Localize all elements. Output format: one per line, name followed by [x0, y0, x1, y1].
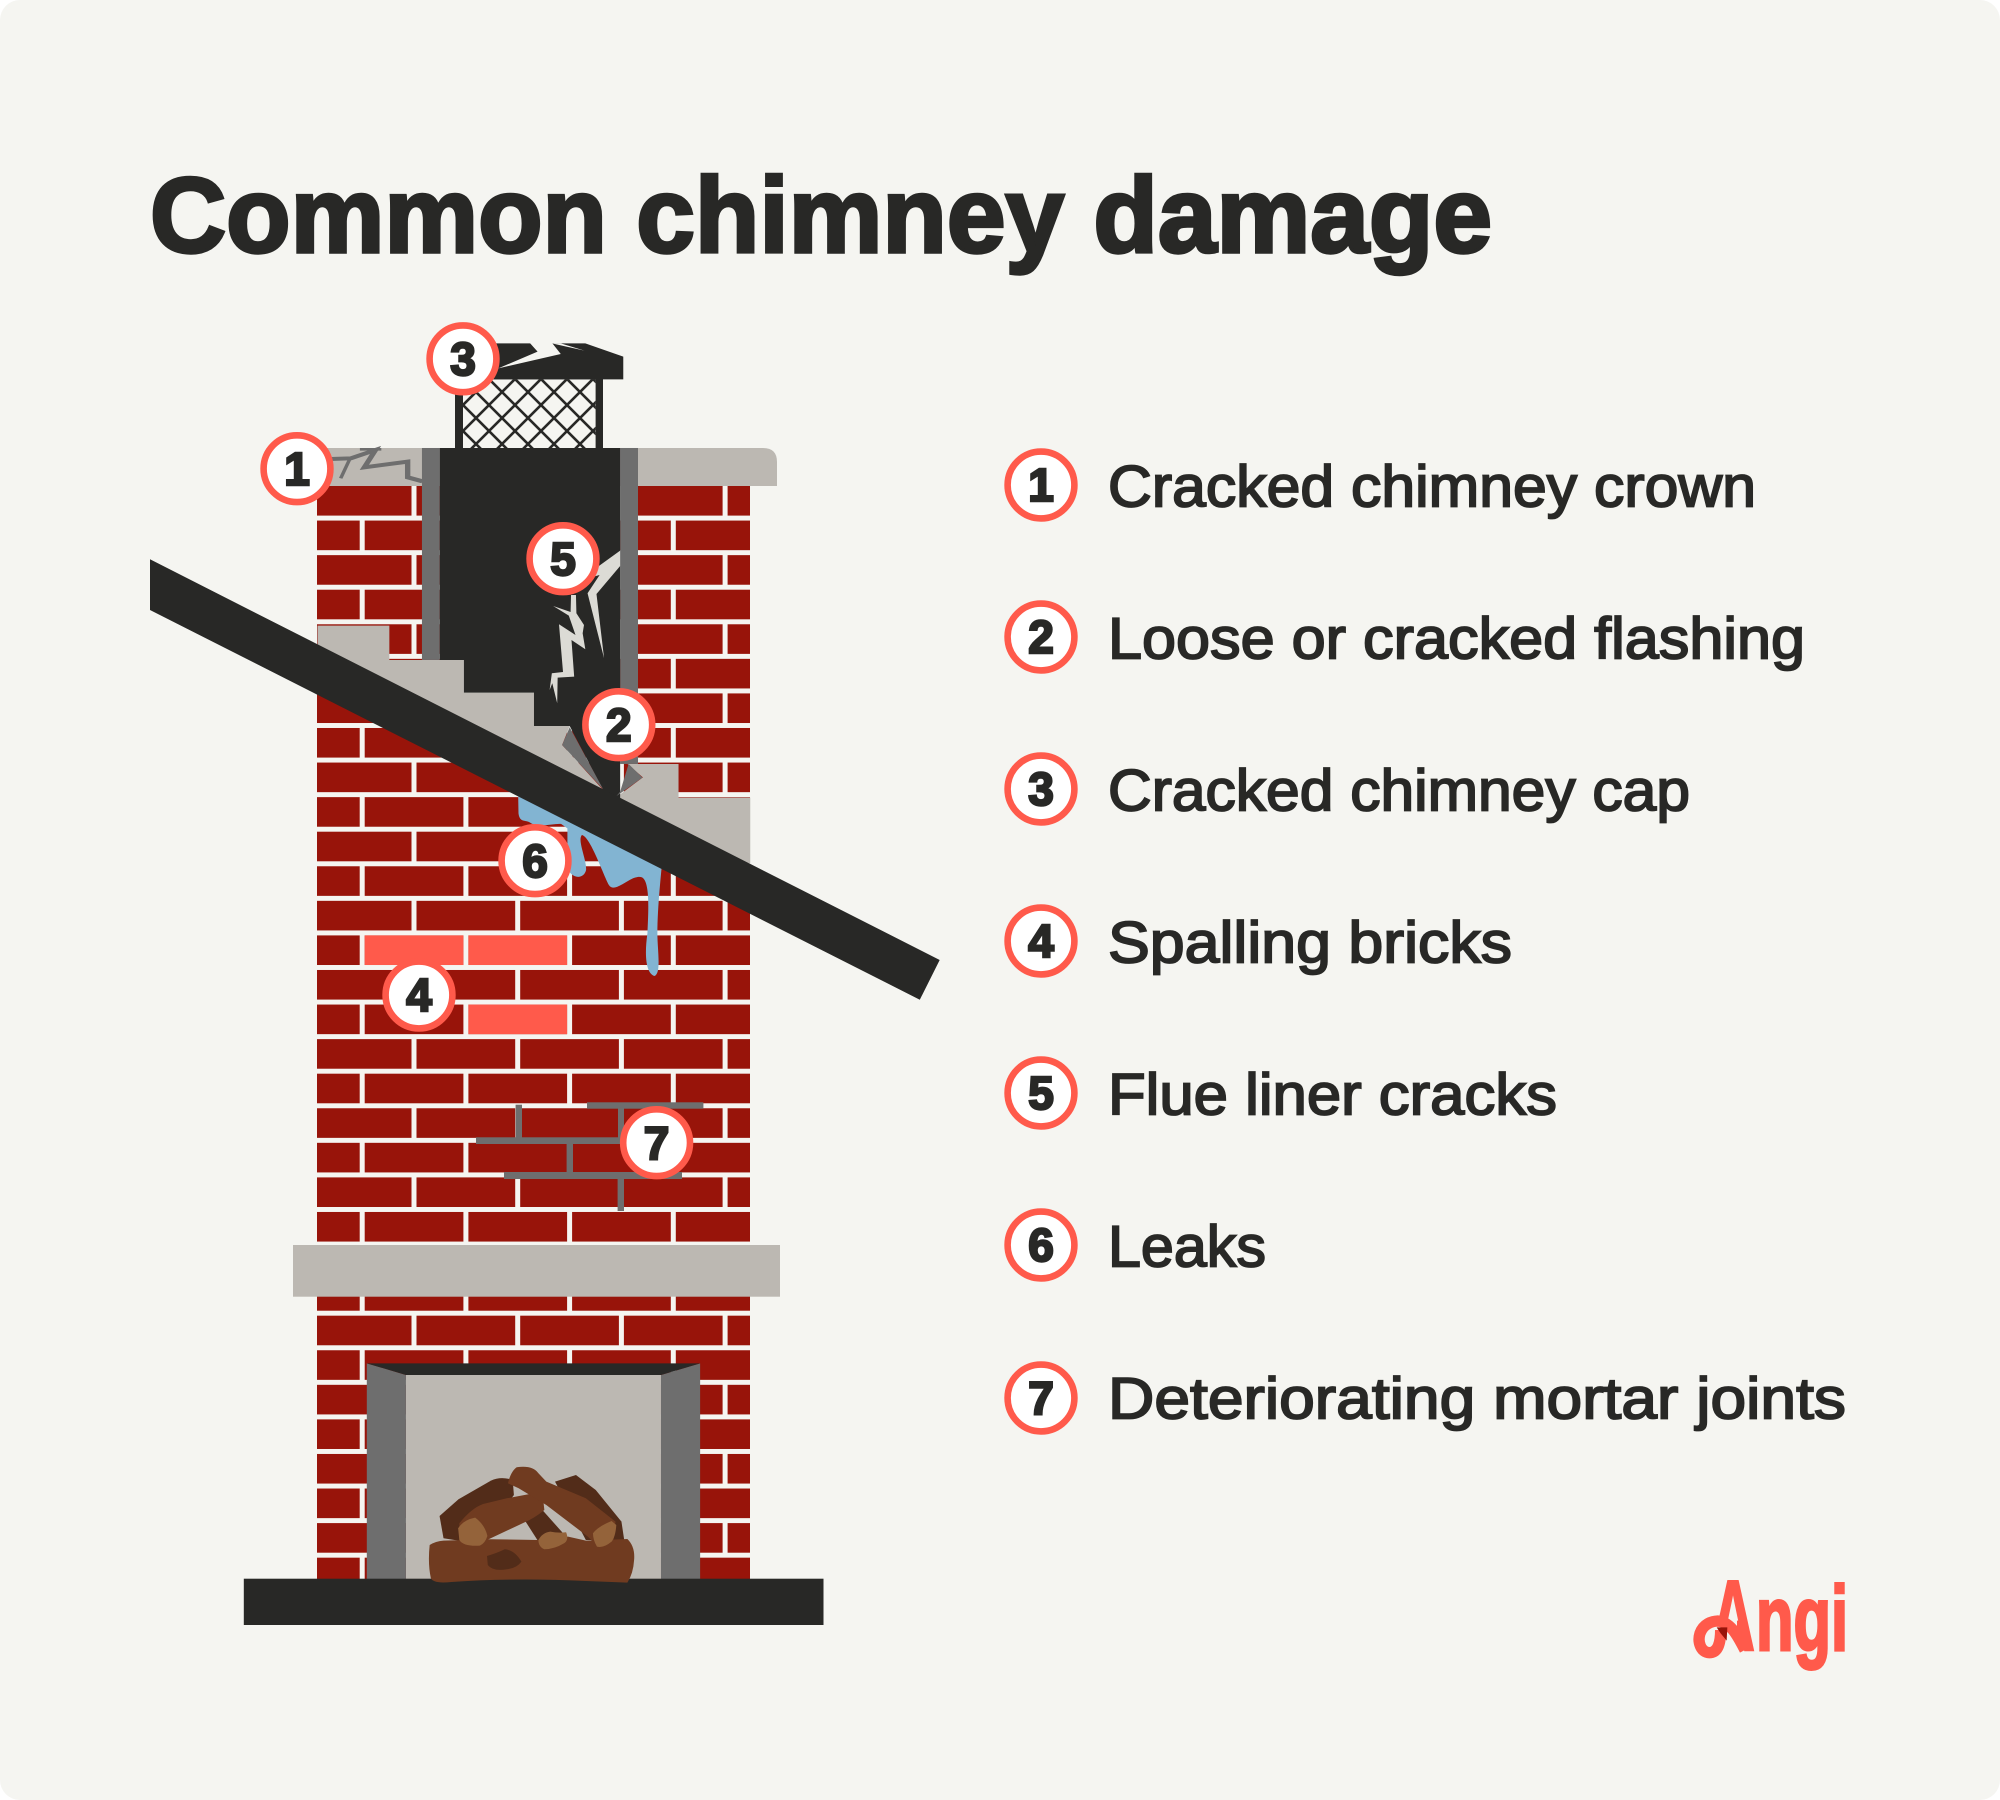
marker 5: 5 — [550, 533, 576, 585]
mantel shelf — [293, 1245, 780, 1297]
legend item 2: Loose or cracked flashing — [1108, 606, 1805, 672]
marker 2: 2 — [606, 699, 632, 751]
marker 3 — [430, 325, 496, 392]
title: Common chimney damage — [150, 155, 1492, 275]
marker 4: 4 — [406, 969, 432, 1021]
legend item 4: Spalling bricks — [1108, 910, 1512, 976]
legend item 3: Cracked chimney cap — [1108, 758, 1690, 824]
logo: Angi: ngi — [1756, 1568, 1848, 1670]
legend item 4: 4 — [1028, 915, 1054, 967]
brick wall — [317, 486, 750, 1587]
chimney cap frame and mesh — [455, 375, 603, 448]
spalling bricks — [365, 935, 567, 1034]
deteriorating mortar joints — [476, 1102, 703, 1211]
right flashing — [617, 764, 750, 863]
marker 7: 7 — [644, 1117, 669, 1169]
logs — [429, 1467, 634, 1583]
legend item 1: Cracked chimney crown — [1108, 454, 1756, 520]
marker 3: 3 — [450, 333, 476, 385]
legend list — [1008, 452, 1846, 1432]
flue liner — [422, 448, 638, 800]
flashing flaps — [562, 727, 642, 796]
marker 1 — [264, 435, 330, 502]
hearth — [244, 1579, 824, 1625]
legend item 2: 2 — [1028, 611, 1054, 663]
firebox — [367, 1363, 700, 1579]
legend item 6: Leaks — [1108, 1214, 1266, 1280]
marker 4 — [386, 962, 452, 1028]
chimney crown — [310, 448, 777, 486]
chimney cap — [434, 343, 623, 379]
logo: Angi: A — [1711, 1560, 1755, 1672]
cap crack — [498, 343, 584, 368]
legend item 7: 7 — [1028, 1372, 1054, 1424]
marker 6: 6 — [522, 835, 548, 887]
marker 2 — [585, 691, 652, 758]
crown crack — [331, 449, 422, 481]
marker 1: 1 — [284, 443, 310, 495]
legend item 5: 5 — [1028, 1067, 1054, 1119]
legend item 3: 3 — [1028, 763, 1054, 815]
legend item 5: Flue liner cracks — [1108, 1062, 1557, 1128]
chimney illustration — [150, 325, 940, 1625]
legend item 6: 6 — [1028, 1219, 1054, 1271]
roof — [150, 559, 940, 1000]
marker 6 — [502, 827, 568, 894]
legend item 6 — [1008, 1212, 1266, 1280]
marker 7 — [623, 1109, 690, 1176]
logo: Angi — [1693, 1580, 1845, 1671]
left flashing — [317, 626, 603, 810]
flue liner cracks — [550, 551, 620, 703]
legend item 1: 1 — [1028, 459, 1054, 511]
leak — [518, 790, 662, 976]
legend item 7: Deteriorating mortar joints — [1108, 1366, 1846, 1432]
marker 5 — [530, 525, 596, 592]
